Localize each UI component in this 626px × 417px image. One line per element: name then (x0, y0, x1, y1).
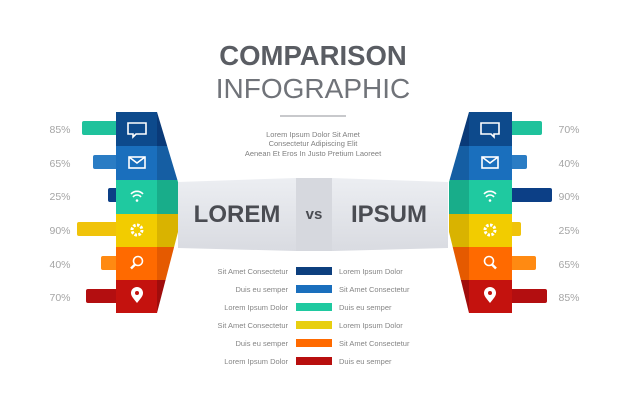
left side faces (157, 112, 178, 313)
legend: Lorem Ipsum Dolor (224, 303, 288, 312)
legend: Sit Amet Consectetur (339, 285, 410, 294)
left percentages: 90% (49, 225, 71, 237)
left percentages: 70% (49, 292, 71, 304)
subtitle text: Aenean Et Eros In Justo Pretium Laoreet (245, 149, 382, 158)
right percentages: 40% (558, 158, 580, 170)
center banner: vs (306, 206, 322, 223)
right side faces (449, 112, 469, 313)
legend: Sit Amet Consectetur (218, 267, 288, 276)
legend: Lorem Ipsum Dolor (339, 321, 403, 330)
title (216, 40, 410, 104)
left percentages (49, 124, 71, 304)
left front faces (116, 112, 157, 313)
center banner: LOREM (194, 201, 280, 228)
legend: Duis eu semper (339, 357, 392, 366)
legend (218, 267, 410, 366)
legend: Lorem Ipsum Dolor (224, 357, 288, 366)
right percentages: 85% (558, 292, 580, 304)
left percentages: 65% (49, 158, 71, 170)
right column (440, 112, 580, 313)
title: COMPARISON (219, 40, 407, 71)
left bars (77, 121, 118, 303)
legend: Sit Amet Consectetur (339, 339, 410, 348)
right bars (509, 121, 552, 303)
legend: Lorem Ipsum Dolor (339, 267, 403, 276)
legend: Sit Amet Consectetur (218, 321, 288, 330)
legend: Duis eu semper (235, 339, 288, 348)
right percentages (558, 124, 580, 304)
subtitle text: Lorem Ipsum Dolor Sit Amet (266, 130, 361, 139)
title: INFOGRAPHIC (216, 73, 410, 104)
subtitle text: Consectetur Adipiscing Elit (269, 139, 358, 148)
center banner: IPSUM (351, 201, 427, 228)
left percentages: 40% (49, 259, 71, 271)
right percentages: 70% (558, 124, 580, 136)
left icons (128, 123, 146, 303)
right front faces (469, 112, 512, 313)
right percentages: 90% (558, 191, 580, 203)
legend: Duis eu semper (339, 303, 392, 312)
right percentages: 65% (558, 259, 580, 271)
left percentages: 25% (49, 191, 71, 203)
left column (49, 112, 190, 313)
subtitle text (245, 130, 382, 158)
left percentages: 85% (49, 124, 71, 136)
right icons (481, 123, 499, 303)
right percentages: 25% (558, 225, 580, 237)
center banner (178, 178, 448, 251)
legend: Duis eu semper (235, 285, 288, 294)
